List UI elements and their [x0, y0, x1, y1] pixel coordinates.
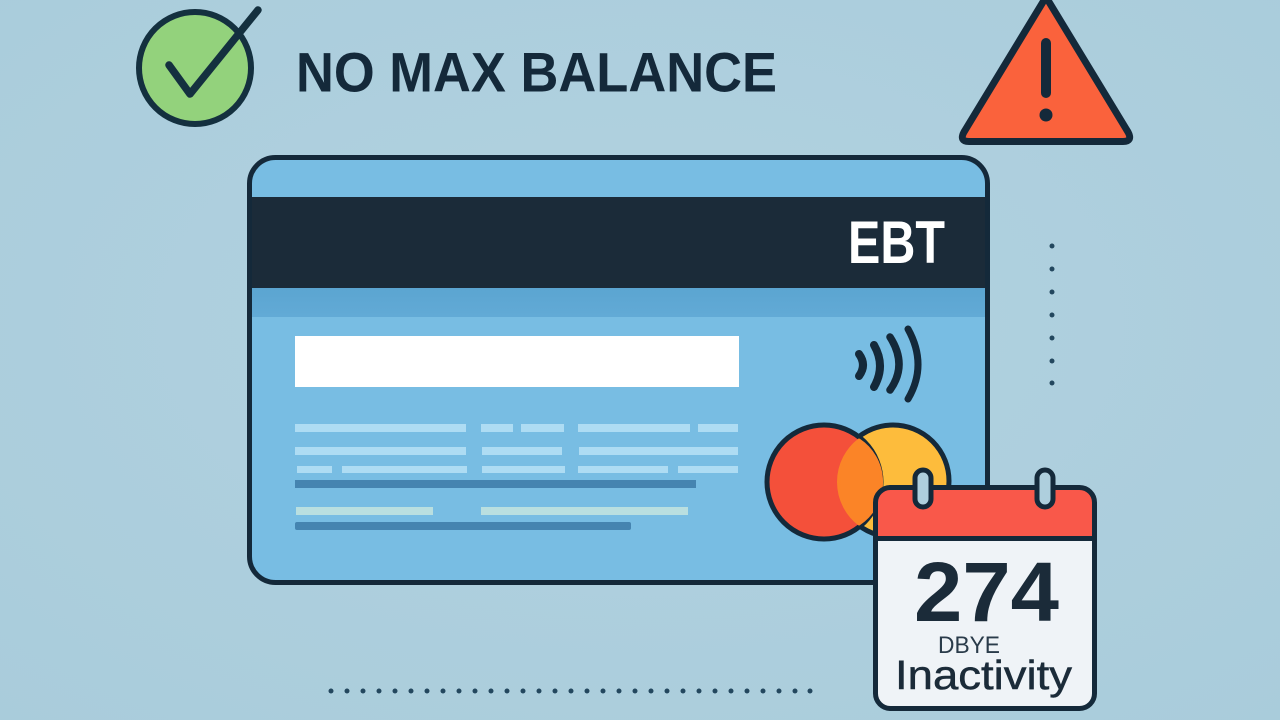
panel: EBT card: [250, 158, 988, 582]
title: NO MAX BALANCE: [296, 40, 777, 104]
days label: DBYE: [938, 632, 1000, 659]
white signature strip: [295, 336, 739, 387]
EBT label: EBT: [848, 209, 945, 276]
calendar ring left: [915, 470, 931, 507]
inactivity label: Inactivity: [895, 652, 1073, 698]
calendar red header: [876, 488, 1094, 538]
horizontal dotted line: [328, 688, 812, 694]
card shaded band: [250, 288, 987, 317]
icon: overlapping red and yellow circles: [767, 425, 949, 539]
card detail lines: [295, 424, 738, 530]
magnetic stripe: [250, 197, 987, 288]
icon: warning triangle: [962, 0, 1130, 142]
number of days: 274: [914, 545, 1059, 639]
panel: calendar: [875, 470, 1095, 708]
vertical dotted line: [1050, 244, 1054, 386]
calendar ring right: [1037, 470, 1053, 507]
icon: green check mark: [139, 10, 258, 124]
icon: contactless waves: [859, 329, 918, 399]
card outline: [250, 158, 988, 582]
